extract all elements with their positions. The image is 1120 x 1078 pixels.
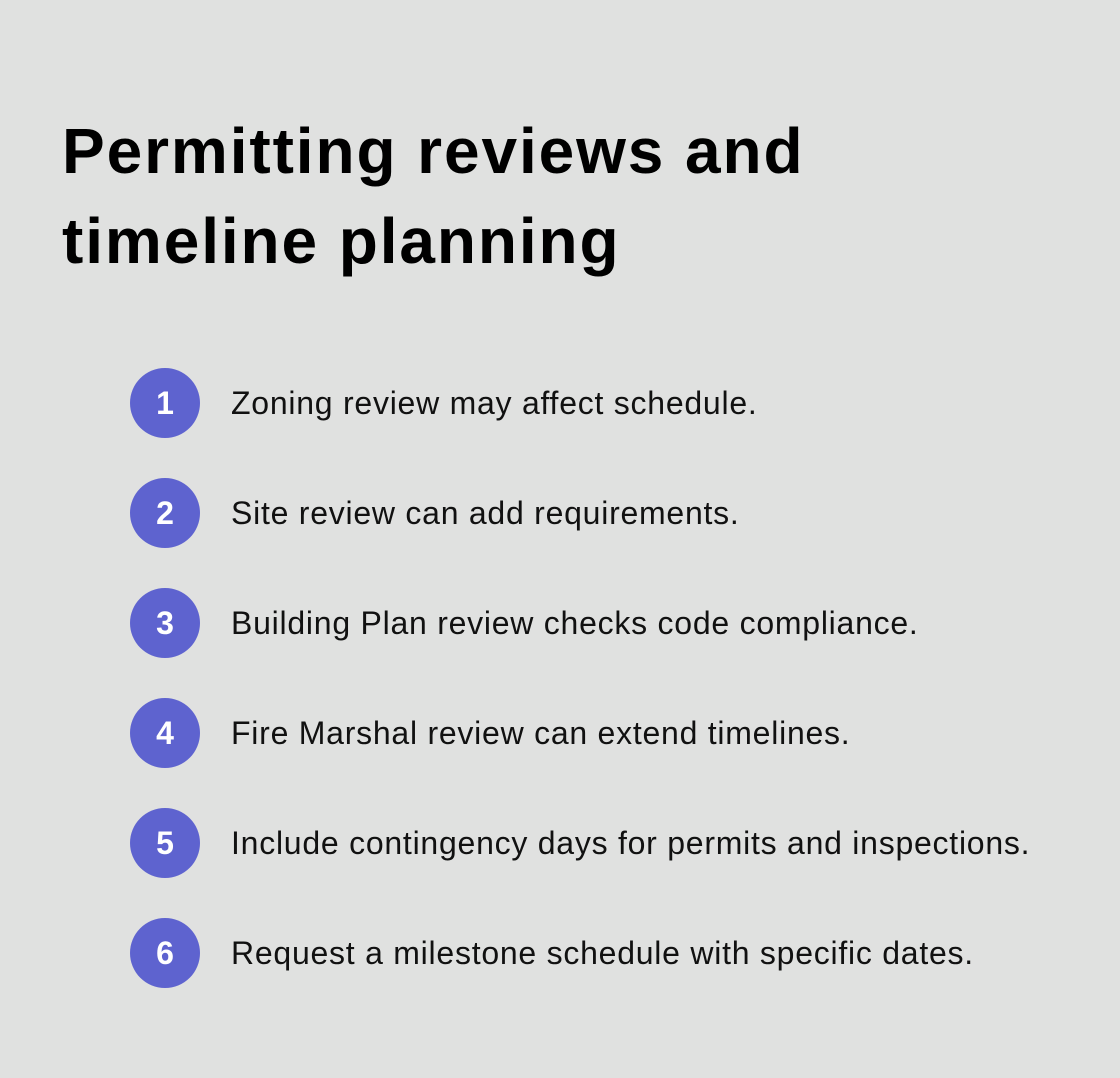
item 2: 2 [156, 495, 174, 531]
item 4 [130, 698, 850, 768]
item 3 [130, 588, 919, 658]
item 4: Fire Marshal review can extend timelines. [231, 715, 850, 751]
item 6: Request a milestone schedule with specific dates. [231, 935, 974, 971]
item 5: 5 [156, 825, 174, 861]
title: timeline planning [62, 205, 621, 277]
item 3: 3 [156, 605, 174, 641]
item 1 [130, 368, 758, 438]
item 2: Site review can add requirements. [231, 495, 740, 531]
item 3: Building Plan review checks code compliance. [231, 605, 919, 641]
item 2 [130, 478, 740, 548]
item 6: 6 [156, 935, 174, 971]
title [62, 115, 804, 277]
item 6 [130, 918, 974, 988]
title: Permitting reviews and [62, 115, 804, 187]
list [130, 368, 1030, 988]
item 1: 1 [156, 385, 174, 421]
item 5 [130, 808, 1030, 878]
item 5: Include contingency days for permits and inspections. [231, 825, 1030, 861]
item 1: Zoning review may affect schedule. [231, 385, 758, 421]
item 4: 4 [156, 715, 174, 751]
